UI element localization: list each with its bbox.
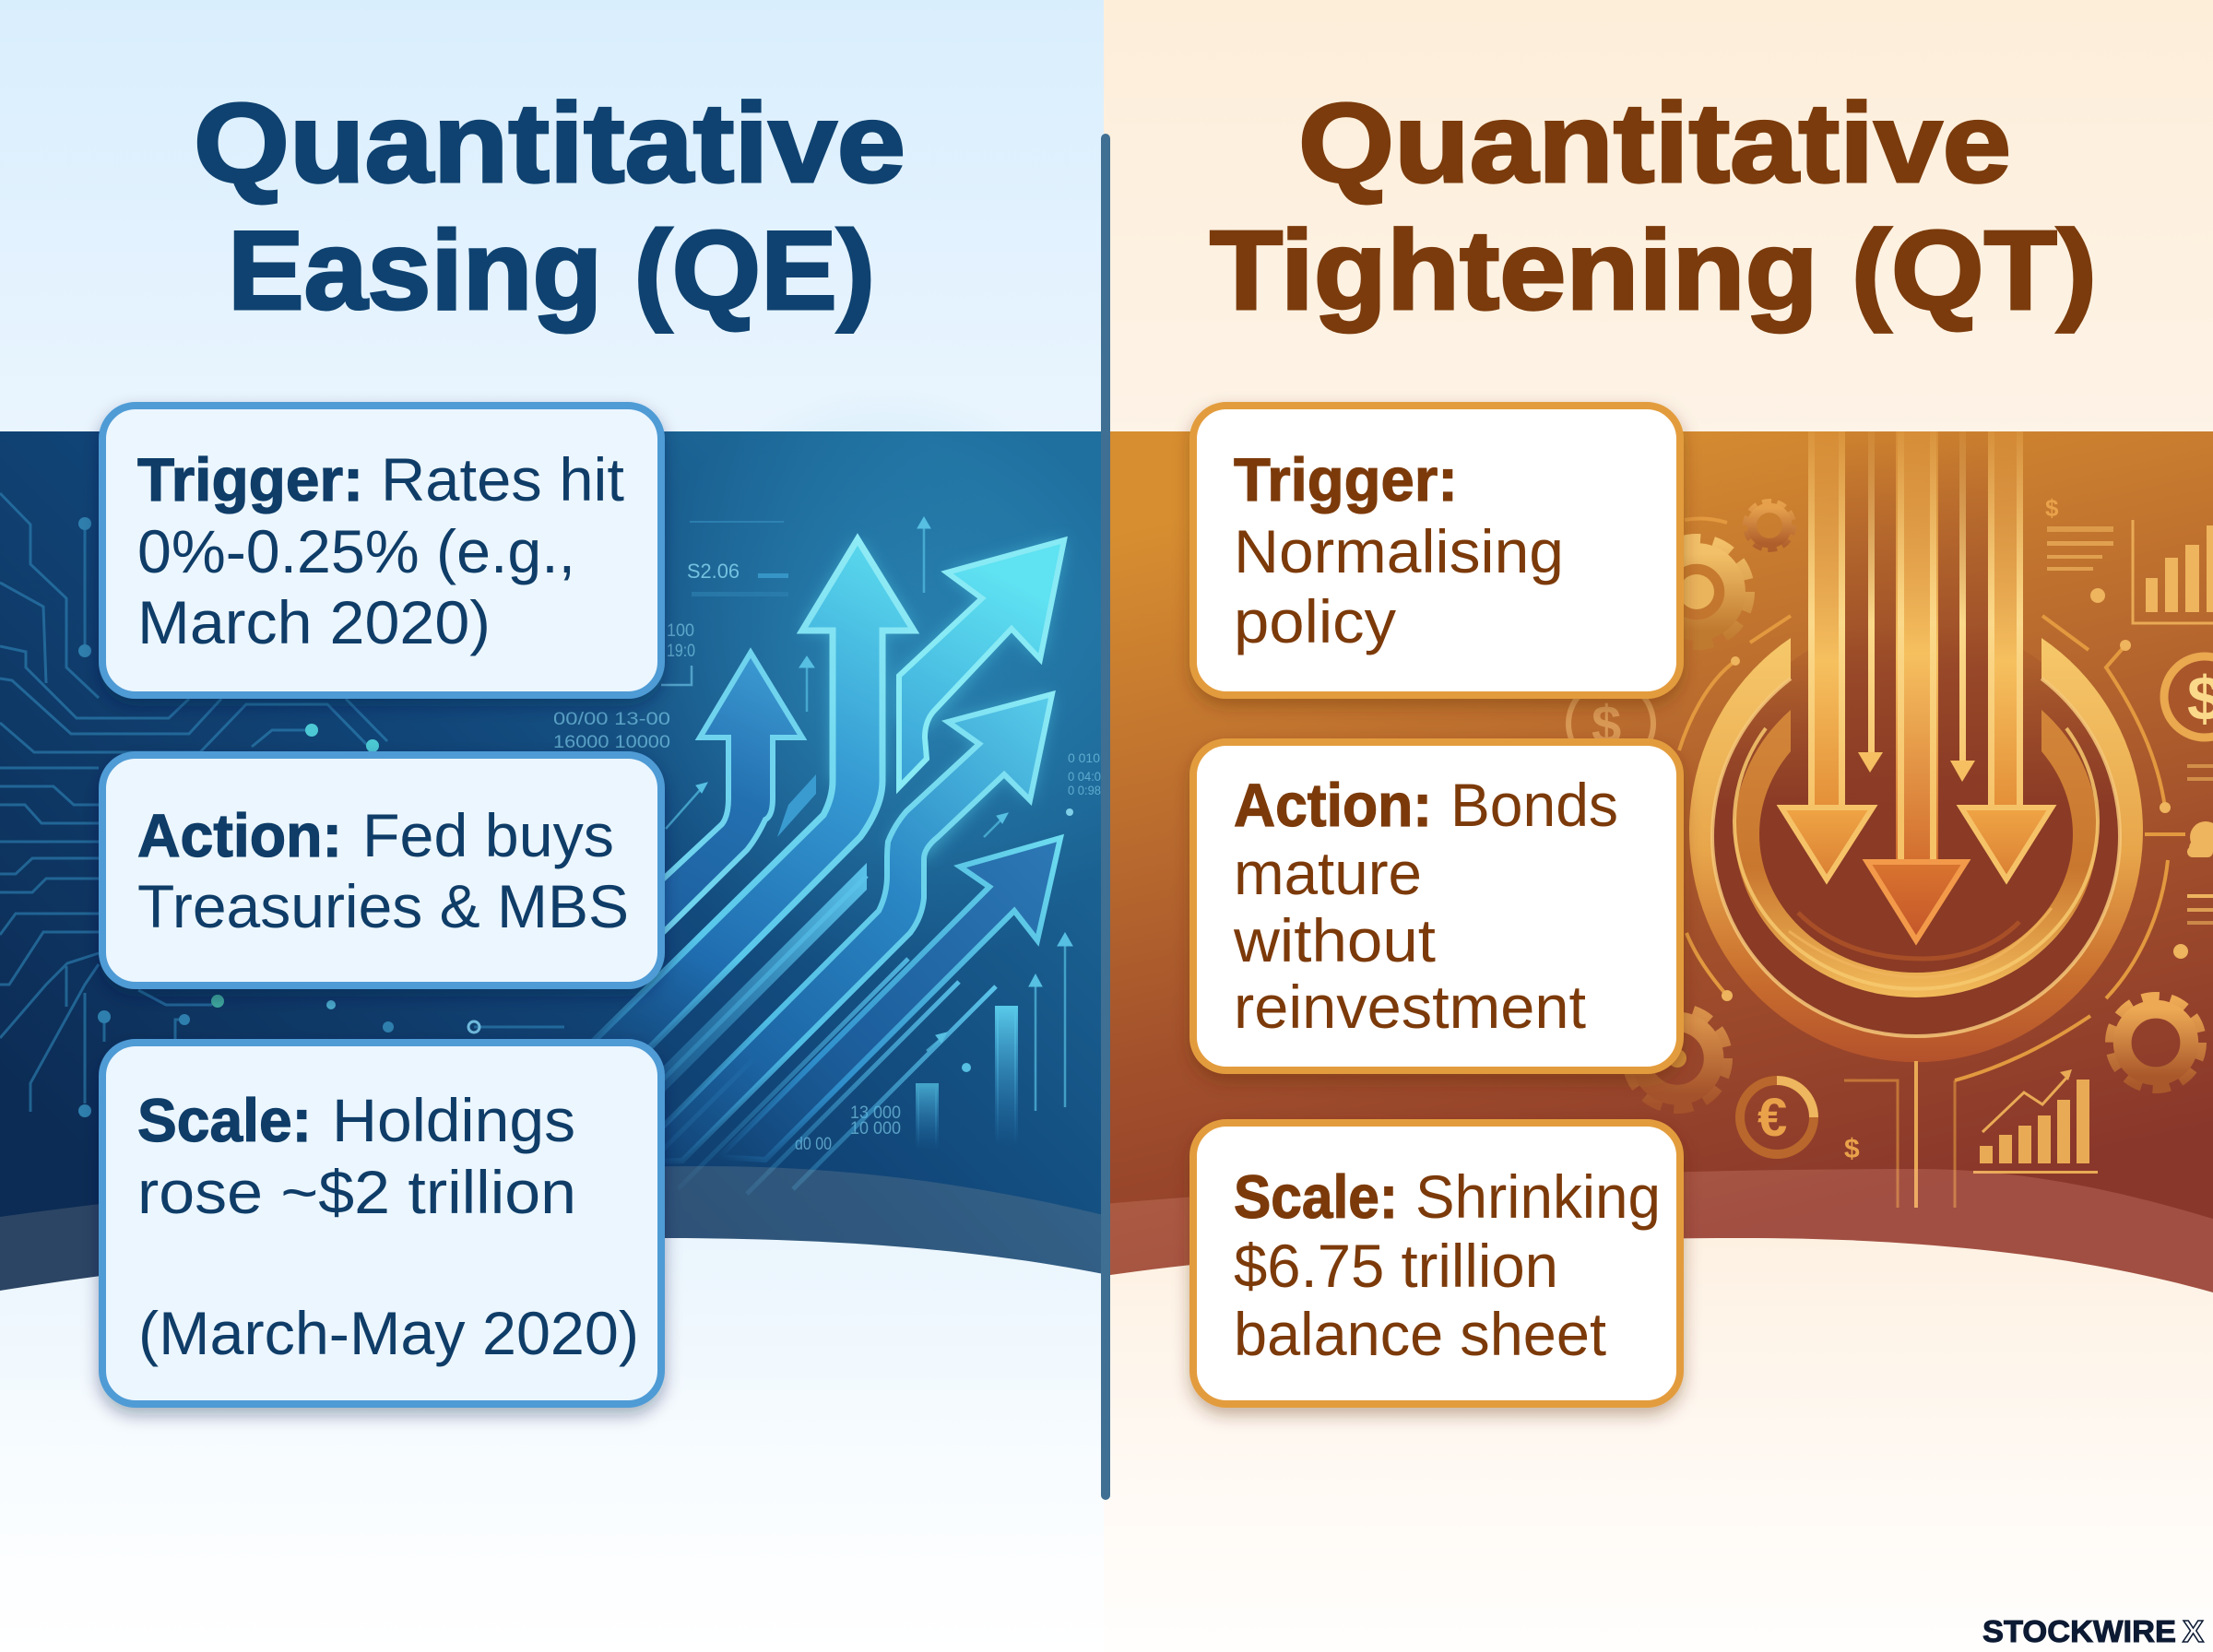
- card: QT action: mature: [1234, 839, 1422, 907]
- data readouts: d0 00: [795, 1135, 832, 1154]
- card: QT trigger: policy: [1234, 587, 1396, 655]
- card: QT trigger: Trigger:: [1234, 445, 1458, 513]
- concentric rings: [1689, 620, 2143, 1062]
- illustration band: QT gears, rings and falling arrows: [1104, 431, 2213, 1309]
- outer crescent: [1689, 638, 2143, 1062]
- coin and currency icons: €: [1757, 1088, 1787, 1148]
- card: QE trigger: [102, 406, 661, 695]
- card: QE scale: Holdings: [332, 1086, 575, 1154]
- title: QE: Quantitative: [194, 80, 905, 206]
- title: QT: Tightening (QT): [1210, 207, 2097, 333]
- translucent ground arc: QE: [0, 1166, 1104, 1309]
- card: QT scale: Shrinking: [1415, 1162, 1661, 1231]
- card: QT action: Bonds: [1450, 771, 1618, 839]
- card: QE scale: Scale:: [137, 1086, 312, 1154]
- arrow: lower diagonal: [719, 838, 1060, 1160]
- panel: QE background: [0, 0, 1104, 1652]
- card: QE trigger: Trigger:: [137, 445, 363, 513]
- arrow glow: [802, 539, 1064, 859]
- arrow: right down: [1961, 808, 2052, 879]
- data readouts: 0 010: [1068, 750, 1100, 765]
- card: QT action: [1193, 742, 1680, 1070]
- band sliver: [627, 863, 867, 1111]
- small up arrows and bars: [666, 517, 1072, 1111]
- data readouts: S2.06: [687, 560, 740, 583]
- data readouts: 13 000: [850, 1103, 901, 1123]
- watermark: STOCKWIRE X: X: [2183, 1614, 2204, 1648]
- card: QE action: Fed buys: [362, 801, 614, 869]
- diagonal streaks: [599, 876, 996, 1194]
- watermark: STOCKWIRE X: STOCKWIRE: [1982, 1614, 2176, 1648]
- lower white area: QT: [1104, 1238, 2213, 1652]
- arrow: center down: [1867, 862, 1966, 940]
- lower white area: QE: [0, 1238, 1104, 1652]
- coin behind cards: $: [1592, 695, 1621, 755]
- data readouts: 100: [667, 621, 694, 641]
- card: QT scale: Scale:: [1234, 1162, 1398, 1231]
- title: QT: Quantitative: [1298, 80, 2011, 206]
- card: QE action: Treasuries & MBS: [137, 872, 629, 940]
- card: QT action: without: [1233, 906, 1436, 974]
- arrow: tall up: [590, 539, 914, 1107]
- data readouts: 16000 10000: [553, 733, 670, 752]
- card: QE action: Action:: [137, 801, 342, 869]
- title: QE: Easing (QE): [228, 207, 875, 333]
- title: QE: [194, 80, 905, 333]
- data readouts: 00/00 13-00: [553, 710, 670, 729]
- card: QT action: reinvestment: [1234, 973, 1586, 1041]
- data readouts: 10 000: [850, 1119, 901, 1139]
- inner crescent: [1734, 710, 2098, 997]
- gears: [1631, 503, 2198, 1104]
- card: QE trigger: Rates hit: [381, 445, 624, 513]
- arrow: small right: [1950, 761, 1975, 782]
- connector lines: [1679, 519, 2185, 1208]
- coin behind cards: [1568, 681, 1653, 766]
- illustration band: QE technology and rising arrows: [0, 387, 1162, 1309]
- data readouts: 0 0:98: [1068, 783, 1101, 797]
- inner swirl arcs: [1798, 913, 2019, 959]
- data readouts: 0 04:0: [1068, 769, 1101, 784]
- panel: QT background: [1104, 0, 2213, 1652]
- coin and currency icons: $: [1844, 1134, 1860, 1164]
- arrow: small left: [1858, 752, 1883, 773]
- vertical light stripes: [1808, 431, 2023, 863]
- card: QT scale: [1193, 1123, 1680, 1404]
- data readouts: [553, 521, 1101, 1154]
- card: QE scale: (March-May 2020): [138, 1299, 639, 1367]
- translucent ground arc: QT: [1104, 1169, 2213, 1309]
- divider: [1101, 134, 1110, 1500]
- arrow: wavy diagonal: [627, 694, 1052, 1162]
- coin and currency icons: $: [2045, 494, 2059, 522]
- card: QE trigger: 0%-0.25% (e.g.,: [137, 517, 575, 585]
- darker columns between stripes: [1845, 431, 1988, 837]
- card: QT scale: $6.75 trillion: [1234, 1232, 1558, 1300]
- title: QT: [1210, 80, 2097, 333]
- arrow: upper diagonal: [899, 540, 1064, 787]
- card: QE trigger: March 2020): [137, 588, 491, 656]
- coin and currency icons: [1740, 494, 2213, 1164]
- circuit nodes: [78, 517, 479, 1117]
- bar chart: upper: [2047, 520, 2213, 623]
- circuit lines: [0, 493, 564, 1112]
- card: QT trigger: [1193, 406, 1680, 695]
- arrow: small up: [627, 653, 802, 968]
- card: QT scale: balance sheet: [1234, 1300, 1606, 1368]
- data readouts: 19:0: [667, 642, 695, 661]
- bar chart: lower: [1973, 1069, 2098, 1174]
- card: QE action: [102, 755, 661, 985]
- card: QT action: Action:: [1234, 771, 1432, 839]
- arrow: left down: [1781, 808, 1873, 879]
- card: QE scale: rose ~$2 trillion: [137, 1158, 576, 1226]
- shard: [777, 774, 816, 837]
- card: QT trigger: Normalising: [1234, 517, 1564, 585]
- card: QE scale: [102, 1043, 661, 1404]
